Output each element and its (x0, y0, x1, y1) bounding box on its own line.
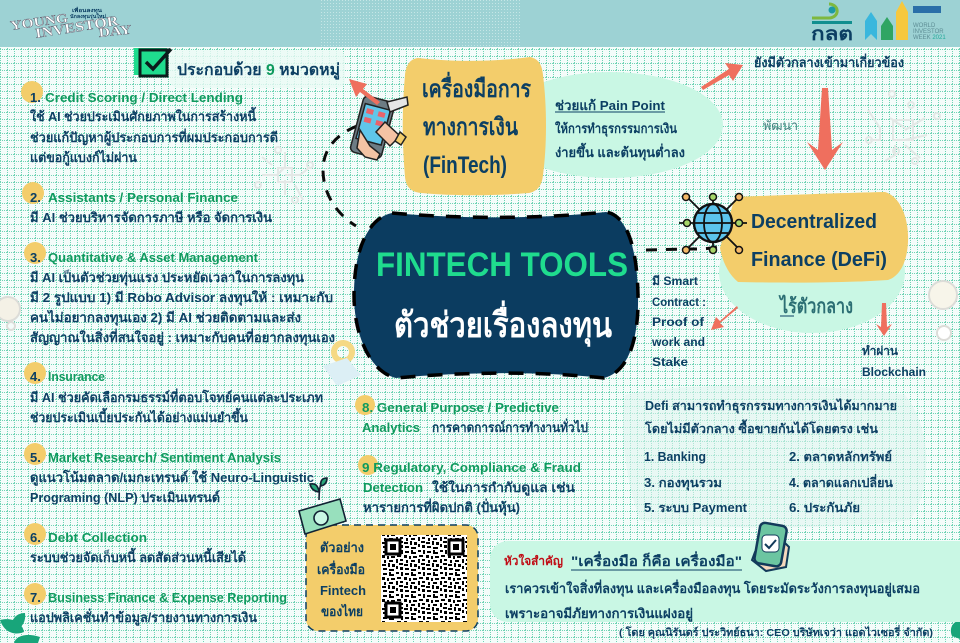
header band (0, 0, 960, 47)
text: via blockchain: ทำผ่าน (862, 344, 899, 358)
text: smart contract: Contract : (652, 295, 706, 309)
category 4: มี AI ช่วยคัดเลือกรมธรรม์ที่ตอบโจทย์คนแต่ละประเภท (30, 388, 323, 405)
category 4 (24, 362, 323, 425)
mint panel: no intermediary (719, 211, 905, 333)
panel: key takeaway: เพราะอาจมีภัยทางการเงินแฝงอยู่ (505, 606, 693, 622)
category 8: การคาดการณ์การทำงานทั่วไป (432, 418, 588, 435)
category 2: 2. (30, 190, 41, 205)
category 3: มี 2 รูปแบบ 1) มี Robo Advisor ลงทุนให้ : เหมาะกับ (30, 289, 333, 306)
category 5: Programing (NLP) ประเมินเทรนด์ (30, 490, 220, 505)
logo: World Investor Week 2021: WORLD (913, 23, 936, 29)
text: smart contract: มี Smart (652, 274, 698, 288)
panel: central title (354, 212, 638, 378)
icon: phone with check (752, 522, 789, 571)
text: via blockchain: Blockchain (862, 365, 926, 379)
category 6: 6. (30, 530, 41, 545)
category 5 (24, 443, 314, 505)
category 5: Market Research/ Sentiment Analysis (48, 450, 281, 465)
panel: DeFi title: Decentralized (751, 211, 877, 233)
panel: FinTech title (403, 57, 546, 195)
panel: examples with QR: Fintech (320, 583, 366, 598)
icon: globe network (679, 194, 747, 254)
category 3: 3. (30, 250, 41, 265)
panel: key takeaway: หัวใจสำคัญ (504, 553, 563, 568)
category 6 (24, 523, 246, 565)
panel: DeFi uses: 4. ตลาดแลกเปลี่ยน (789, 474, 893, 490)
category 1: ช่วยแก้ปัญหาผู้ประกอบการที่ผมประกอบการดี (30, 128, 278, 146)
category 4: 4. (30, 369, 41, 384)
category 9: ใช้ในการกำกับดูแล เช่น (432, 479, 575, 496)
text: smart contract (651, 274, 706, 369)
icon: phone in hands (349, 95, 408, 160)
category 3 (24, 242, 335, 346)
icon: circuit left (255, 147, 313, 203)
panel: examples with QR: ของไทย (321, 603, 363, 619)
category 2 (22, 182, 272, 225)
category 2: Assistants / Personal Finance (48, 190, 238, 205)
panel: key takeaway (490, 541, 960, 622)
text: pain point (555, 98, 685, 161)
category 1: Credit Scoring / Direct Lending (45, 90, 243, 105)
logo: SEC Thailand: กลต (811, 24, 853, 45)
logo: World Investor Week 2021: INVESTOR (913, 29, 944, 35)
logo: Young Investor Day: นักลงทุนรุ่นใหม่ (70, 13, 106, 20)
category 7: Business Finance & Expense Reporting (48, 590, 287, 605)
category 1: แต่ขอกู้แบงก์ไม่ผ่าน (30, 149, 137, 166)
icon: money plant (299, 478, 346, 534)
category 5: 5. (30, 450, 41, 465)
icon: plant bottom left (0, 613, 40, 643)
panel: FinTech title: เครื่องมือการ (422, 71, 531, 103)
icon: coin right (929, 281, 957, 340)
logo: SEC Thailand (811, 4, 853, 45)
dashed link: FinTech to title (323, 126, 357, 226)
logo: Young Investor Day: YOUNG (9, 10, 69, 33)
panel: DeFi title: Finance (DeFi) (751, 249, 887, 271)
panel: DeFi uses (623, 386, 926, 528)
panel: FinTech title: ทางการเงิน (423, 114, 518, 141)
text: smart contract: Proof of (652, 315, 705, 329)
text: pain point: ช่วยแก้ Pain Point (555, 98, 666, 113)
panel: central title: FINTECH TOOLS (376, 246, 628, 284)
panel: DeFi uses: Defi สามารถทำธุรกรรมทางการเงินได้มากมาย (645, 398, 897, 414)
text: pain point: ง่ายขึ้น และต้นทุนต่ำลง (555, 142, 685, 161)
category 1: ใช้ AI ช่วยประเมินศักยภาพในการสร้างหนี้ (30, 106, 257, 124)
category 9: หารายการที่ผิดปกติ (ปั่นหุ้น) (363, 498, 520, 516)
text: via blockchain (862, 344, 926, 379)
logo: Young Investor Day: เพื่อนลงทุน (72, 6, 103, 14)
category 7: แอปพลิเคชั่นทำข้อมูล/รายงานทางการเงิน (30, 608, 257, 626)
category 5: ดูแนวโน้มตลาด/เมกะเทรนด์ ใช้ Neuro-Linguistic (30, 469, 314, 486)
category 9: 9 Regulatory, Compliance & Fraud (362, 460, 581, 475)
text: pain point: ให้การทำธุรกรรมการเงิน (555, 120, 677, 137)
panel: DeFi uses: 5. ระบบ Payment (644, 501, 748, 515)
arrow: to top left (349, 79, 380, 105)
text: no intermediary: ไร้ตัวกลาง (778, 294, 853, 318)
category 7: 7. (30, 590, 41, 605)
icon: gear and board (323, 343, 361, 386)
category 4: Insurance (48, 369, 105, 384)
icon: plant bottom right (951, 620, 960, 639)
panel: DeFi uses: 2. ตลาดหลักทรัพย์ (789, 449, 892, 464)
panel: key takeaway: "เครื่องมือ ก็คือ เครื่องมือ" (571, 551, 742, 569)
category 2: มี AI ช่วยบริหารจัดการภาษี หรือ จัดการเงิน (30, 210, 272, 225)
text: develop: พัฒนา (763, 118, 798, 133)
logo: World Investor Week 2021: WEEK 2021 (913, 35, 946, 41)
category 1 (21, 81, 278, 166)
text: still has intermediary: ยังมีตัวกลางเข้ามาเกี่ยวข้อง (754, 53, 904, 70)
category 3: Quantitative & Asset Management (48, 250, 259, 265)
category 3: สัญญาณในสิ่งที่สนใจอยู่ : เหมาะกับคนที่อยากลงทุนเอง (30, 328, 335, 346)
arrow: down (807, 88, 843, 170)
panel: central title: ตัวช่วยเรื่องลงทุน (394, 300, 612, 347)
arrow: to intermediary (701, 63, 743, 90)
category 6: Debt Collection (48, 530, 147, 545)
panel: examples with QR: เครื่องมือ (317, 560, 365, 577)
pale panel behind heading (170, 50, 345, 88)
category 8: Analytics (362, 420, 420, 435)
category 7 (24, 583, 287, 626)
panel: FinTech title: (FinTech) (423, 152, 507, 179)
text: author credit: ( โดย คุณนิรันดร์ ประวิทย์ธนา: CEO บริษัทเจว่า แอดไวเซอรี่ จำกัด) (619, 624, 933, 640)
panel: examples with QR (306, 525, 478, 631)
category 8: 8. General Purpose / Predictive (362, 400, 559, 415)
panel: key takeaway: เราควรเข้าใจสิ่งที่ลงทุน และเครื่องมือลงทุน โดยระมัดระวังการลงทุนอยู่เสมอ (505, 579, 920, 597)
icon: circuit right (866, 91, 940, 164)
logo: World Investor Week 2021 (865, 1, 946, 41)
text: smart contract: work and (651, 335, 705, 349)
icon: coin left (0, 297, 20, 330)
logo: Young Investor Day: INVESTOR (34, 14, 121, 42)
logo: Young Investor Day: DAY (98, 22, 133, 40)
category 9 (358, 455, 581, 516)
panel: DeFi uses: 1. Banking (644, 450, 706, 464)
panel: examples with QR: ตัวอย่าง (320, 540, 364, 555)
arrow: to blockchain (876, 303, 892, 336)
category 3: มี AI เป็นตัวช่วยทุ่นแรง ประหยัดเวลาในการลงทุน (30, 268, 304, 286)
text: smart contract: Stake (652, 355, 688, 369)
panel: DeFi title (720, 192, 908, 283)
dashed link: title to DeFi (646, 241, 730, 250)
panel: DeFi uses: 3. กองทุนรวม (644, 476, 722, 491)
category 6: ระบบช่วยจัดเก็บหนี้ ลดสัดส่วนหนี้เสียได้ (30, 547, 246, 565)
logo: Young Investor Day (9, 6, 133, 42)
category 4: ช่วยประเมินเบี้ยประกันได้อย่างแม่นยำขึ้น (30, 407, 248, 425)
arrow: to smart contract (711, 306, 738, 330)
heading: nine categories: ประกอบด้วย 9 หมวดหมู่ (177, 61, 340, 81)
panel: DeFi uses: 6. ประกันภัย (789, 501, 860, 515)
category 8 (355, 395, 588, 435)
panel: DeFi uses: โดยไม่มีตัวกลาง ซื้อขายกันได้โดยตรง เช่น (644, 419, 878, 436)
icon: checkbox (134, 48, 171, 76)
mint panel: pain point (497, 72, 723, 178)
QR code (381, 535, 467, 622)
category 3: คนไม่อยากลงทุนเอง 2) มี AI ช่วยติดตามและส่ง (30, 309, 301, 326)
category 9: Detection (363, 480, 423, 495)
category 1: 1. (30, 90, 41, 105)
